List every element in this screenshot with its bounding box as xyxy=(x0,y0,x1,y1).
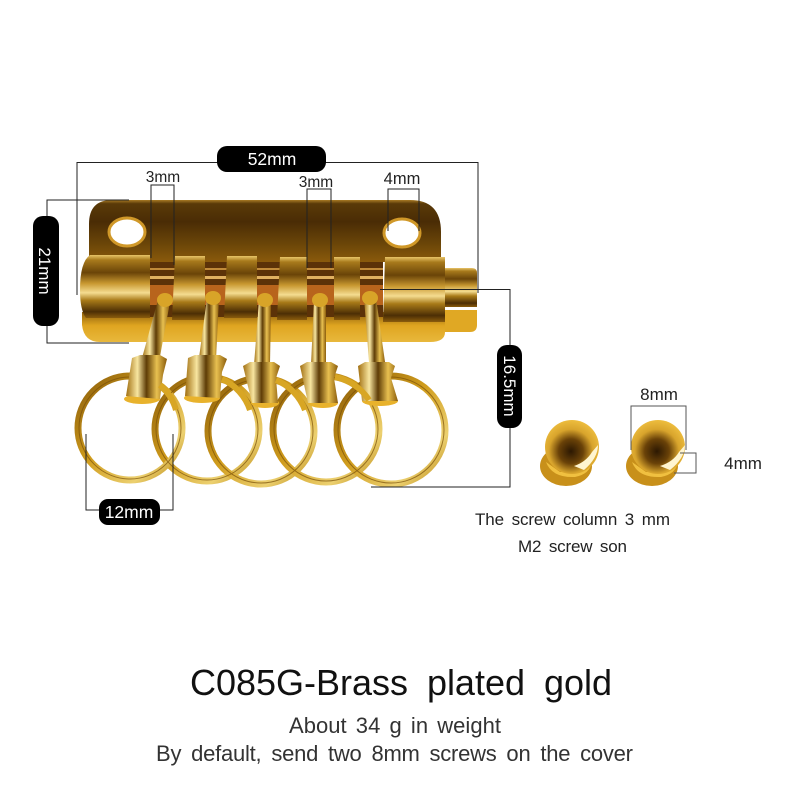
product photo: key holder xyxy=(78,200,477,484)
mounting plate with screw holes xyxy=(89,200,441,262)
default screws note: By default, send two 8mm screws on the cover xyxy=(156,741,633,766)
label: 21mm xyxy=(33,216,59,326)
barrel knuckles xyxy=(80,255,445,322)
label: 3mm left: 3mm xyxy=(146,169,180,186)
weight note: About 34 g in weight xyxy=(289,713,501,738)
label: 12mm xyxy=(99,499,160,525)
ring overlaps in front of ferrules xyxy=(160,377,369,410)
gold highlight on screw holes xyxy=(109,218,420,247)
slots between knuckles xyxy=(150,262,383,317)
right screw xyxy=(626,420,685,486)
left screw xyxy=(540,420,599,486)
label: 52mm: 52mm xyxy=(248,149,296,169)
ring split-strand lines xyxy=(79,377,444,483)
label: 21mm: 21mm xyxy=(35,247,54,295)
label: 16.5mm xyxy=(497,345,522,428)
barrel base xyxy=(82,312,445,342)
label: 16.5mm: 16.5mm xyxy=(500,355,519,417)
label: 4mm slot: 4mm xyxy=(384,170,420,188)
title: C085G-Brass plated gold xyxy=(190,662,612,703)
screw posts xyxy=(540,420,685,486)
screw note line 2: M2 screw son xyxy=(518,537,627,556)
label: 8mm: 8mm xyxy=(640,385,678,404)
label: 12mm: 12mm xyxy=(105,502,153,522)
label: 3mm right: 3mm xyxy=(299,174,333,191)
pins and ferrules xyxy=(124,291,398,408)
slot shine lines and orange thread xyxy=(150,268,383,305)
label: 4mm screw: 4mm xyxy=(724,454,762,473)
key rings xyxy=(78,376,445,484)
end bolt xyxy=(445,268,477,307)
dimension lines xyxy=(47,162,696,510)
screw note line 1: The screw column 3 mm xyxy=(475,510,670,529)
label: 52mm xyxy=(217,146,326,172)
